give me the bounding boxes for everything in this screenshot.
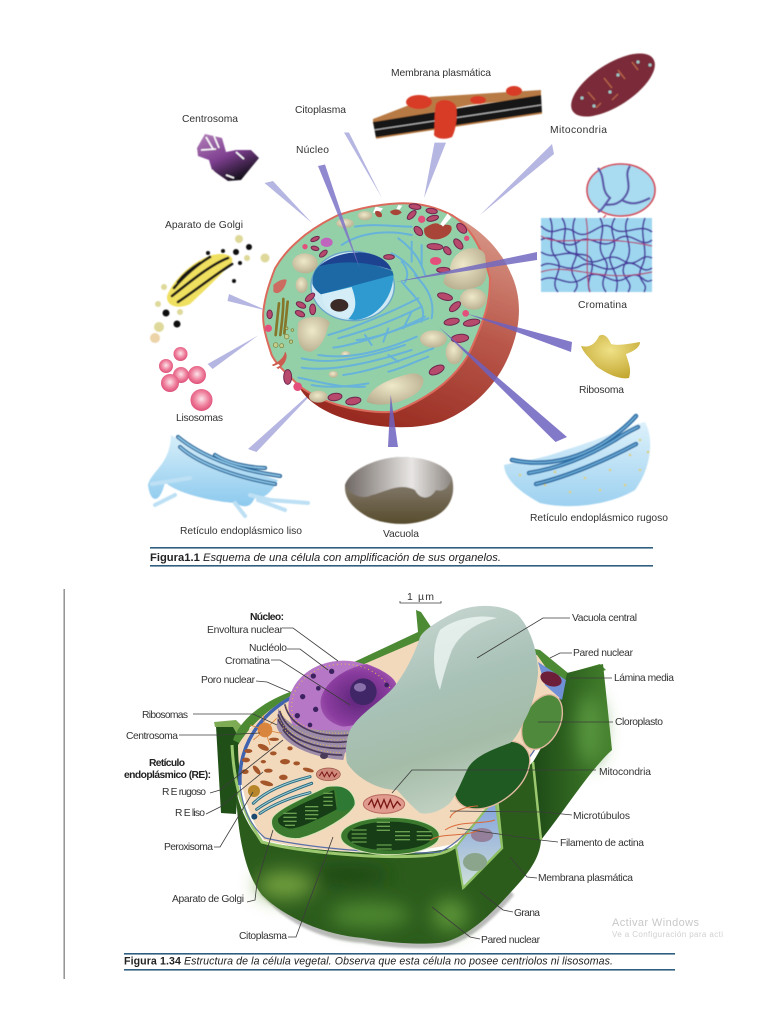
pointer wedges over cell bbox=[318, 164, 572, 447]
golgi vesicles bbox=[273, 327, 294, 348]
labels: animal cell organelles: Ribosoma bbox=[579, 385, 624, 396]
watermark: Activar Windows bbox=[612, 917, 723, 939]
wall shadow bbox=[260, 880, 514, 948]
labels: animal cell organelles: Vacuola bbox=[383, 529, 419, 540]
plant cell wall bbox=[214, 610, 612, 948]
nucleus bbox=[311, 251, 394, 321]
icon: lysosomes bbox=[159, 347, 212, 411]
labels: animal cell organelles: Centrosoma bbox=[182, 114, 238, 125]
main front wall bbox=[236, 762, 541, 944]
vesicles bbox=[292, 211, 487, 405]
animal cell sphere bbox=[263, 203, 519, 427]
pink granules bbox=[265, 216, 469, 391]
labels: plant cell organelles: Peroxisoma bbox=[164, 842, 213, 853]
icon: vacuole bbox=[345, 457, 453, 524]
icon: mitochondrion bbox=[561, 41, 665, 129]
plant organelles in left cytoplasm bbox=[241, 661, 398, 820]
right wall bbox=[533, 664, 612, 840]
labels: animal cell organelles: Retículo endoplásmico rugoso bbox=[530, 513, 668, 524]
panel: plant cell figure bbox=[124, 591, 675, 971]
icon: plasma membrane bbox=[373, 86, 542, 139]
golgi in cell bbox=[276, 299, 288, 335]
icon: ribosome bbox=[581, 335, 640, 378]
centrosome bbox=[250, 715, 282, 745]
labels: animal cell organelles: Lisosomas bbox=[176, 413, 223, 424]
labels: animal cell organelles: Aparato de Golgi bbox=[165, 220, 243, 231]
plasma membrane invaginations bbox=[272, 205, 452, 369]
labels: animal cell organelles: Membrana plasmática bbox=[391, 68, 491, 79]
labels: plant cell organelles: Ribosomas bbox=[142, 710, 188, 721]
labels: animal cell organelles: Retículo endoplásmico liso bbox=[180, 526, 302, 537]
labels: plant cell organelles: Cloroplasto bbox=[615, 717, 663, 728]
pointer wedges bbox=[208, 132, 554, 452]
icon: Golgi apparatus bbox=[150, 235, 270, 343]
scale bar bbox=[400, 591, 441, 603]
front-center chloroplast bbox=[341, 817, 439, 855]
left wall flap bbox=[216, 726, 242, 814]
icon: rough ER bbox=[504, 416, 650, 506]
front-left chloroplast bbox=[272, 786, 355, 839]
labels: plant cell organelles: endoplásmico (RE): bbox=[124, 770, 211, 781]
small mitochondrion bbox=[316, 768, 340, 781]
Golgi stack bbox=[251, 777, 312, 820]
labels: plant cell organelles: Envoltura nuclear bbox=[207, 625, 284, 636]
labels: plant cell organelles: Mitocondria bbox=[599, 767, 651, 778]
caption: figure 1.1: Figura1.1 Esquema de una célula con amplificación de sus organelos. bbox=[150, 552, 501, 564]
labels: animal cell organelles: Núcleo bbox=[296, 145, 329, 156]
right chloroplasts bbox=[441, 688, 571, 823]
labels: plant cell organelles: Pared nuclear bbox=[573, 648, 634, 659]
nucleus bbox=[288, 661, 398, 753]
blue membrane band bbox=[240, 697, 292, 785]
icon: smooth ER bbox=[148, 435, 308, 516]
labels: plant cell organelles: Núcleo: bbox=[250, 612, 284, 623]
labels: plant cell organelles: Grana bbox=[514, 908, 540, 919]
cytoplasm face bbox=[263, 203, 490, 412]
panel: animal cell figure bbox=[148, 41, 668, 567]
peroxisome bbox=[248, 785, 260, 797]
labels: plant cell organelles: Retículo bbox=[149, 758, 185, 769]
cytoskeleton fibers bbox=[430, 806, 495, 840]
plant organelles in front bbox=[272, 786, 439, 855]
labels: plant cell organelles: Membrana plasmática bbox=[538, 873, 633, 884]
labels: animal cell organelles: Cromatina bbox=[578, 300, 627, 311]
labels: plant cell organelles: Poro nuclear bbox=[201, 675, 256, 686]
labels: animal cell organelles: Citoplasma bbox=[295, 105, 346, 116]
labels: plant cell organelles: Cromatina bbox=[225, 656, 270, 667]
labels: plant cell organelles: R E liso bbox=[175, 808, 205, 819]
labels: plant cell organelles: R E rugoso bbox=[162, 787, 206, 798]
light wall rim bbox=[232, 745, 457, 857]
endoplasmic reticulum bbox=[298, 225, 433, 387]
cytoplasm bbox=[238, 640, 562, 852]
red outer sphere bbox=[298, 215, 519, 427]
center-right wall bbox=[495, 762, 541, 868]
labels: animal cell organelles bbox=[165, 68, 668, 540]
large mitochondrion bbox=[363, 795, 405, 813]
icon: chromatin bbox=[541, 164, 655, 292]
watermark: Activar Windows: Activar Windows bbox=[612, 917, 700, 929]
icon: centrosoma bbox=[197, 134, 259, 181]
labels: plant cell organelles: Aparato de Golgi bbox=[172, 894, 244, 905]
labels: plant cell organelles: Citoplasma bbox=[239, 931, 287, 942]
labels: plant cell organelles: Microtúbulos bbox=[573, 811, 630, 822]
purple granule cluster bbox=[321, 238, 333, 247]
vacuole highlight bbox=[434, 616, 497, 690]
margin rule bbox=[64, 589, 65, 979]
leader lines bbox=[179, 618, 613, 939]
labels: plant cell organelles: Lámina media bbox=[614, 673, 674, 684]
labels: plant cell organelles: Vacuola central bbox=[572, 613, 637, 624]
labels: plant cell organelles: Centrosoma bbox=[126, 731, 178, 742]
labels: plant cell organelles: Nucléolo bbox=[249, 643, 287, 654]
watermark: Activar Windows: Ve a Configuración para acti bbox=[612, 930, 723, 939]
labels: plant cell organelles bbox=[124, 612, 674, 946]
back wall rim bbox=[233, 610, 606, 745]
labels: animal cell organelles: Mitocondria bbox=[550, 125, 607, 136]
scale bar: 1 µm bbox=[407, 591, 434, 603]
labels: plant cell organelles: Filamento de actina bbox=[560, 838, 644, 849]
caption: figure 1.34: Figura 1.34 Estructura de la célula vegetal. Observa que esta célula no posee centriolos ni lisosomas. bbox=[124, 956, 613, 968]
blue side panels bbox=[456, 662, 566, 888]
labels: plant cell organelles: Pared nuclear bbox=[481, 935, 541, 946]
cytoplasm granules bbox=[241, 738, 314, 787]
rough ER stacks bbox=[277, 703, 350, 760]
central vacuole bbox=[346, 606, 538, 814]
wall light patches bbox=[257, 695, 602, 931]
mitochondria bbox=[267, 203, 480, 406]
